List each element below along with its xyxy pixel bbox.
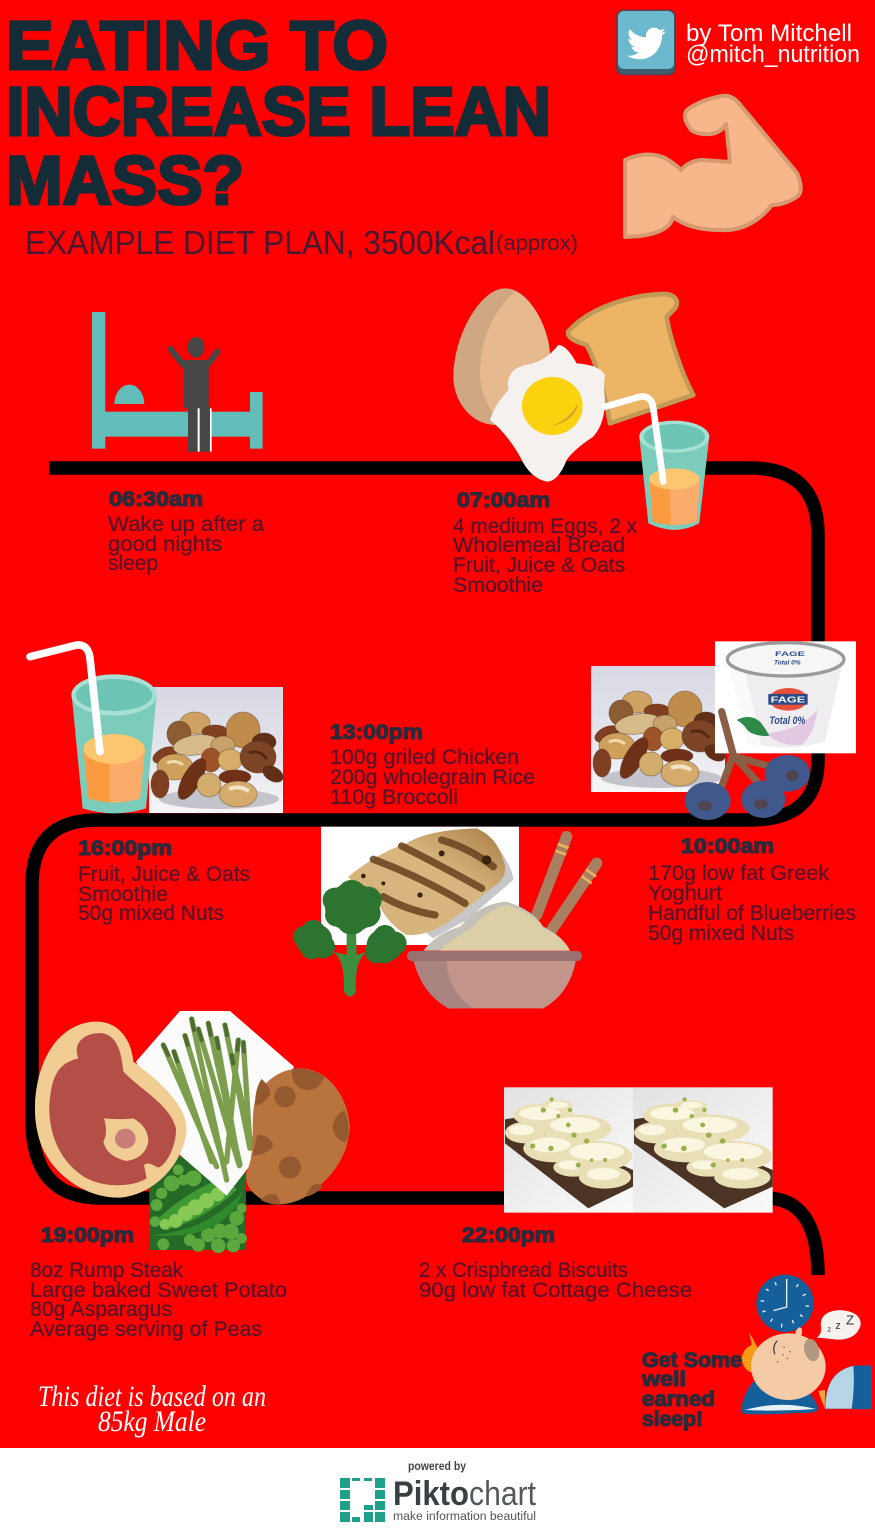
sign-off text: sleep! (642, 1408, 703, 1431)
icon: fried egg (490, 345, 605, 482)
icon: clock (756, 1275, 814, 1332)
07:00 text: Fruit, Juice & Oats (453, 554, 625, 577)
07:00 text: Wholemeal Bread (453, 534, 625, 557)
10:00 text: Yoghurt (648, 882, 722, 905)
19:00 text: Average serving of Peas (30, 1318, 262, 1341)
footnote: This diet is based on an (38, 1380, 266, 1413)
icon: steak (35, 1022, 187, 1198)
Piktochart logo mark (340, 1478, 385, 1522)
image: mixed nuts, 10:00 (591, 666, 728, 792)
10:00 text: Handful of Blueberries (648, 902, 856, 925)
icon: toast (568, 294, 693, 423)
19:00 text: 19:00pm (41, 1224, 134, 1247)
16:00 text (78, 837, 250, 925)
icon: egg (453, 288, 550, 425)
powered by label: powered by (408, 1461, 467, 1473)
breakfast illustration: egg, toast, juice (453, 288, 709, 530)
image: peas (149, 1157, 247, 1253)
19:00 text: 8oz Rump Steak (30, 1259, 183, 1282)
19:00 text (30, 1224, 287, 1341)
10:00 text (648, 835, 856, 945)
19:00 text: 80g Asparagus (30, 1298, 172, 1321)
22:00 text: 90g low fat Cottage Cheese (419, 1279, 692, 1302)
07:00 text: 4 medium Eggs, 2 x (453, 515, 637, 538)
sign-off text: earned (642, 1388, 715, 1411)
author credit: by Tom Mitchell (686, 20, 852, 47)
icon: potato (246, 1068, 350, 1204)
icon: juice glass with straw (30, 645, 157, 813)
06:30 text (108, 488, 264, 575)
icon: sleeping figure with clock (741, 1275, 872, 1414)
subtitle: (approx) (496, 232, 578, 255)
image: Greek yoghurt tub: FAGE (771, 695, 806, 704)
footer: powered by Piktochart (0, 1448, 875, 1536)
13:00 text: 100g griled Chicken (330, 746, 519, 769)
image: crispbread with cottage cheese (504, 1087, 773, 1213)
07:00 text (453, 489, 637, 597)
19:00 text: Large baked Sweet Potato (30, 1279, 287, 1302)
image: Greek yoghurt tub: Total 0% (774, 660, 801, 666)
icon: bed and person (92, 312, 263, 452)
speech bubble: zzz: z (835, 1320, 841, 1332)
subtitle: EXAMPLE DIET PLAN, 3500Kcal (25, 224, 495, 261)
06:30 text: sleep (108, 552, 158, 575)
icon: twitter (616, 10, 676, 75)
title: INCREASE LEAN (6, 73, 551, 150)
speech bubble: zzz: Z (846, 1312, 854, 1327)
image: grilled chicken (321, 827, 519, 945)
icon: broccoli (293, 880, 407, 997)
sign-off text: Get Some (642, 1349, 742, 1372)
icon: blueberries (685, 712, 810, 820)
author credit: @mitch_nutrition (686, 41, 860, 68)
footnote: 85kg Male (98, 1405, 206, 1438)
07:00 text: Smoothie (453, 574, 543, 597)
sign-off text (641, 1349, 742, 1431)
06:30 text: good nights (108, 533, 222, 556)
speech bubble: zzz (817, 1310, 861, 1340)
footer: powered by Piktochart: chart (469, 1475, 536, 1513)
timeline path (32, 468, 818, 1275)
lunch illustration: chicken, broccoli, rice (293, 827, 597, 1008)
image: Greek yoghurt tub: FAGE (775, 651, 806, 658)
icon: flexed arm (625, 96, 801, 237)
13:00 text: 13:00pm (330, 721, 423, 744)
07:00 text: 07:00am (457, 489, 550, 512)
13:00 text (330, 721, 535, 809)
tagline: make information beautiful (393, 1511, 536, 1523)
22:00 text: 22:00pm (462, 1224, 555, 1247)
author credit (686, 20, 860, 68)
speech bubble: zzz: z (827, 1325, 831, 1334)
title (6, 7, 551, 219)
16:00 text: 16:00pm (78, 837, 172, 860)
image: Greek yoghurt tub (715, 641, 856, 753)
image: rice bowl with chopsticks (407, 837, 597, 1008)
16:00 text: Smoothie (78, 883, 168, 906)
16:00 text: 50g mixed Nuts (78, 902, 224, 925)
image: Greek yoghurt tub: Total 0% (769, 715, 806, 727)
Piktochart wordmark: Pikto (393, 1475, 469, 1513)
image: asparagus (136, 1011, 294, 1196)
sign-off text: well (641, 1368, 686, 1391)
image: mixed nuts, 16:00 (149, 687, 286, 813)
06:30 text: 06:30am (109, 488, 203, 511)
13:00 text: 110g Broccoli (330, 786, 458, 809)
dinner illustration: peas, asparagus, steak, potato (35, 1011, 350, 1253)
10:00 text: 10:00am (681, 835, 774, 858)
22:00 text (419, 1224, 692, 1302)
footnote (38, 1380, 266, 1438)
16:00 text: Fruit, Juice & Oats (78, 863, 250, 886)
title: EATING TO (6, 7, 388, 84)
06:30 text: Wake up after a (108, 513, 264, 536)
10:00 text: 50g mixed Nuts (648, 922, 794, 945)
13:00 text: 200g wholegrain Rice (330, 766, 535, 789)
icon: juice glass (605, 396, 709, 530)
title: MASS? (6, 142, 244, 219)
10:00 text: 170g low fat Greek (648, 862, 830, 885)
22:00 text: 2 x Crispbread Biscuits (419, 1259, 628, 1282)
